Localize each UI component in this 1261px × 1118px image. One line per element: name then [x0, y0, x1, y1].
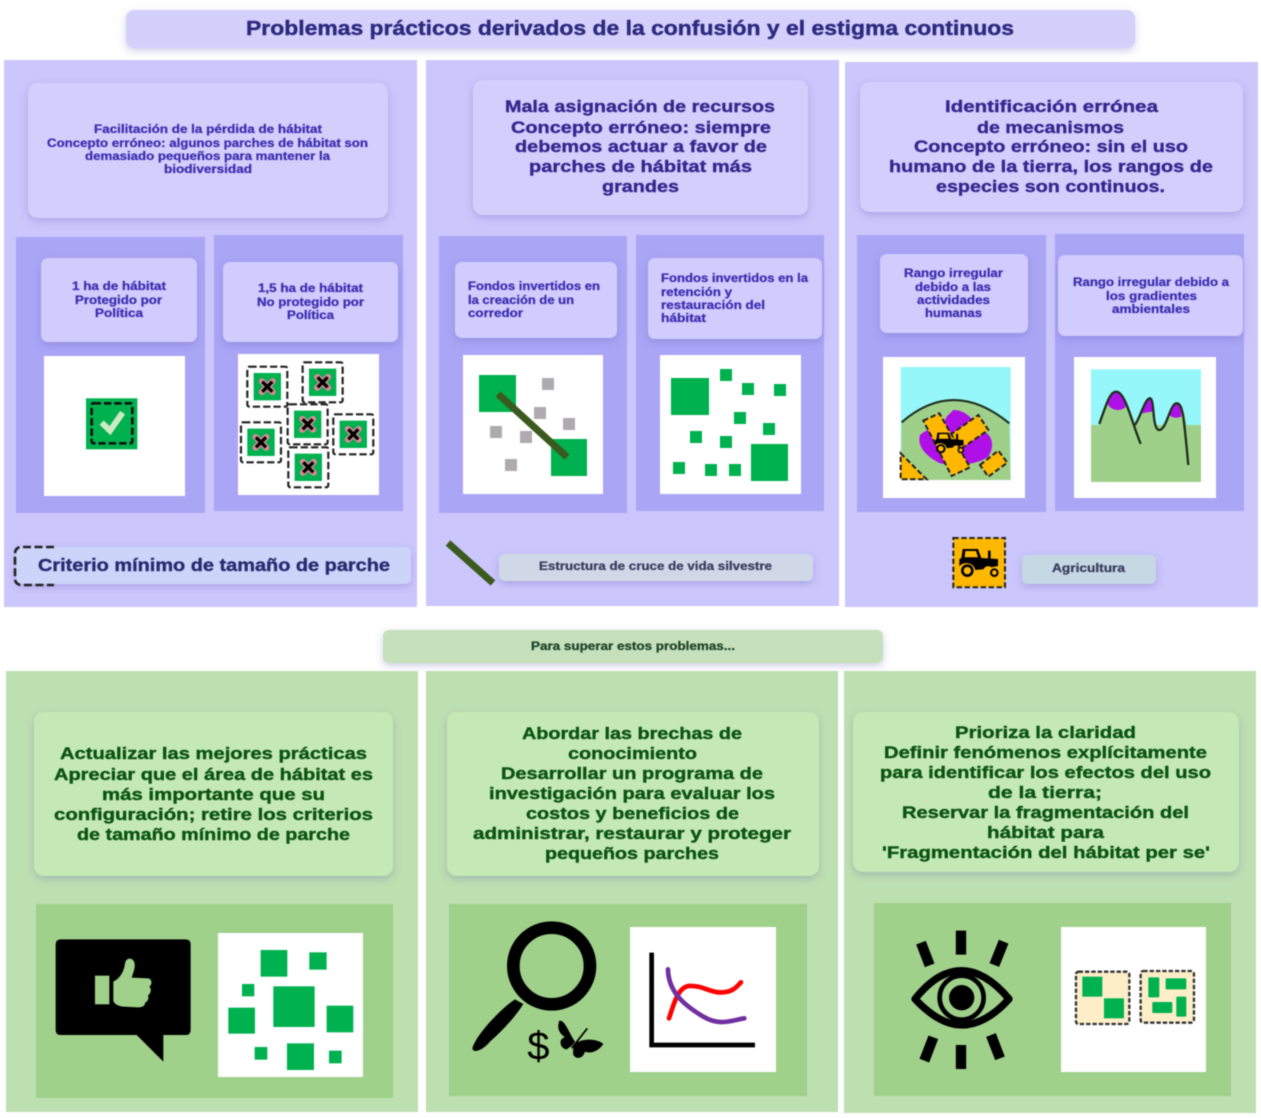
- subpanel: gradientes ambientales: [1055, 234, 1244, 511]
- map: retained patches: [671, 369, 788, 481]
- subpanel: retención: Fondos invertidos en la: [661, 273, 809, 285]
- card: brechas de conocimiento: investigación para evaluar los: [489, 784, 775, 803]
- icon: magnifier with dollar and butterfly: [472, 928, 603, 1068]
- card: mejores prácticas: de tamaño mínimo de parche: [77, 825, 350, 844]
- subpanel: 1 ha protegido: Política: [95, 308, 144, 320]
- subpanel: 1,5 ha no protegido: No protegido por: [257, 297, 365, 309]
- subpanel: corredor: Fondos invertidos en: [468, 281, 600, 293]
- illustration: mountains with gradient ranges: [1091, 369, 1201, 482]
- panel: abordar las brechas de conocimiento: [426, 671, 838, 1112]
- card: claridad: Prioriza la claridad: [955, 723, 1136, 742]
- panel: prioriza la claridad: [844, 671, 1256, 1113]
- card: mejores prácticas: configuración; retire los criterios: [54, 805, 373, 824]
- legend: estructura de cruce: Estructura de cruce de vida silvestre: [539, 561, 772, 573]
- card: claridad: hábitat para: [987, 823, 1105, 842]
- icon: magnifier with dollar and butterfly: $: [527, 1024, 549, 1068]
- card: facilitación: demasiado pequeños para mantener la: [85, 151, 331, 163]
- legend: estructura de cruce: [448, 543, 813, 583]
- card: identificación errónea: especies son continuos.: [936, 177, 1165, 196]
- card: claridad: de la tierra;: [988, 783, 1102, 802]
- card: mala asignación: Concepto erróneo: siempre: [511, 118, 771, 137]
- card: brechas de conocimiento: administrar, restaurar y proteger: [473, 824, 791, 843]
- icon: protected patch with check: [86, 398, 137, 449]
- subpanel: 1 ha protegido: [16, 237, 205, 513]
- card: mejores prácticas: Actualizar las mejores prácticas: [60, 744, 367, 763]
- card: claridad: 'Fragmentación del hábitat per se': [882, 843, 1210, 862]
- subpanel: retención: retención y: [661, 287, 733, 299]
- legend: agricultura: [953, 538, 1156, 587]
- card: brechas de conocimiento: conocimiento: [568, 744, 697, 763]
- subpanel: gradientes ambientales: los gradientes: [1106, 291, 1197, 303]
- card: brechas de conocimiento: pequeños parches: [545, 844, 719, 863]
- card: brechas de conocimiento: costos y beneficios de: [526, 804, 739, 823]
- card: identificación errónea: humano de la tierra, los rangos de: [889, 157, 1213, 176]
- map: two landscape comparison: [1076, 971, 1194, 1024]
- card: identificación errónea: Concepto erróneo: sin el uso: [914, 137, 1188, 156]
- subpanel: retención: restauración del: [661, 300, 765, 312]
- legend: agricultura: Agricultura: [1052, 563, 1126, 575]
- subpanel: corredor: [439, 236, 627, 513]
- card: mala asignación: Mala asignación de recursos: [505, 97, 775, 116]
- card: mala asignación: parches de hábitat más: [529, 157, 752, 176]
- banner: para superar: Para superar estos problemas...: [531, 641, 735, 653]
- subpanel: gradientes ambientales: ambientales: [1112, 304, 1190, 316]
- card: identificación errónea: de mecanismos: [977, 118, 1124, 137]
- panel: mala asignación de recursos: [426, 60, 839, 606]
- card: brechas de conocimiento: [447, 712, 819, 876]
- card: identificación errónea: Identificación errónea: [945, 97, 1159, 116]
- subpanel: actividades humanas: humanas: [925, 308, 982, 320]
- card: mejores prácticas: [34, 712, 393, 876]
- subpanel: actividades humanas: [857, 235, 1046, 512]
- card: claridad: Definir fenómenos explícitamente: [884, 743, 1207, 762]
- icon: eye: [915, 931, 1009, 1069]
- subpanel: actividades humanas: Rango irregular: [904, 268, 1004, 280]
- card: facilitación: [28, 83, 388, 218]
- icon: unprotected small patches: [241, 362, 373, 487]
- map: scattered patches: [228, 950, 353, 1070]
- subpanel: actividades humanas: actividades: [917, 295, 990, 307]
- card: facilitación: Concepto erróneo: algunos parches de hábitat son: [47, 138, 368, 150]
- chart: crossing curves: [652, 953, 755, 1045]
- illustration: hill with agriculture: [901, 367, 1011, 480]
- card: mala asignación: debemos actuar a favor de: [515, 137, 767, 156]
- panel: facilitación de la pérdida de hábitat: [4, 60, 417, 607]
- subpanel: corredor: corredor: [468, 308, 524, 320]
- panel: identificación errónea de mecanismos: [845, 62, 1258, 607]
- card: mejores prácticas: Apreciar que el área de hábitat es: [54, 765, 373, 784]
- card: mala asignación: grandes: [602, 177, 679, 196]
- card: brechas de conocimiento: Desarrollar un programa de: [501, 764, 763, 783]
- subpanel: 1 ha protegido: 1 ha de hábitat: [72, 281, 166, 293]
- card: identificación errónea: [860, 82, 1243, 212]
- subpanel: 1,5 ha no protegido: [214, 235, 403, 511]
- card: claridad: [853, 712, 1239, 872]
- card: claridad: Reservar la fragmentación del: [902, 803, 1189, 822]
- subpanel: actividades humanas: debido a las: [915, 282, 991, 294]
- legend: criterio mínimo: [15, 547, 411, 585]
- title: [126, 10, 1135, 48]
- icon: thumbs up bubble: [56, 939, 191, 1062]
- legend: criterio mínimo: Criterio mínimo de tamaño de parche: [38, 555, 390, 575]
- subpanel: 1 ha protegido: Protegido por: [75, 295, 163, 307]
- map: corridor between two patches: [479, 375, 587, 476]
- card: brechas de conocimiento: Abordar las brechas de: [522, 724, 742, 743]
- card: facilitación: biodiversidad: [164, 164, 252, 176]
- card: claridad: para identificar los efectos del uso: [880, 763, 1211, 782]
- panel: actualizar las mejores prácticas: [6, 671, 418, 1112]
- subpanel: corredor: la creación de un: [468, 295, 574, 307]
- card: facilitación: Facilitación de la pérdida de hábitat: [94, 124, 322, 136]
- subpanel: retención: [636, 235, 824, 511]
- subpanel: 1,5 ha no protegido: 1,5 ha de hábitat: [258, 283, 363, 295]
- subpanel: gradientes ambientales: Rango irregular debido a: [1073, 277, 1230, 289]
- subpanel: 1,5 ha no protegido: Política: [287, 310, 335, 322]
- card: mala asignación: [473, 80, 808, 215]
- subpanel: retención: hábitat: [661, 313, 706, 325]
- banner: para superar: [383, 630, 883, 663]
- card: mejores prácticas: más importante que su: [102, 785, 325, 804]
- title: Problemas prácticos derivados de la confusión y el estigma continuos: [246, 18, 1014, 40]
